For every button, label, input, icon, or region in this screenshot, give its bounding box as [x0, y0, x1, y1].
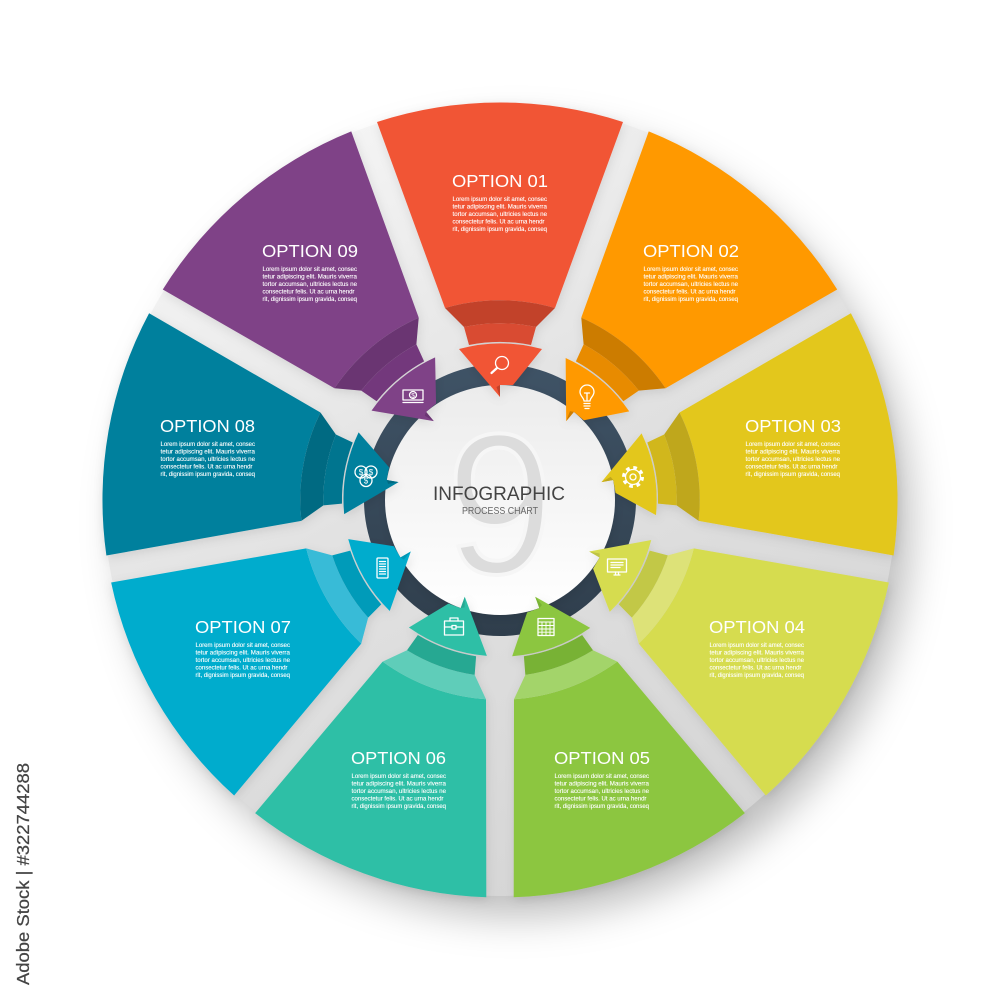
icon: phone	[377, 558, 388, 578]
text: option 01: rit, dignissim ipsum gravida, conseq	[452, 226, 547, 233]
icon: gear	[624, 468, 642, 486]
icon: briefcase	[444, 618, 464, 635]
central dark ring	[364, 364, 636, 636]
icon: calendar	[538, 618, 554, 636]
side label: Adobe Stock | #322744288	[13, 763, 33, 985]
text: option 03: tetur adipiscing elit. Mauris viverra	[746, 448, 840, 456]
segment 1 shape	[377, 102, 623, 397]
text: option 05: consectetur felis. Ut ac urna hendr	[554, 796, 647, 802]
text: option 03: consectetur felis. Ut ac urna hendr	[746, 464, 838, 470]
text: option 09: OPTION 09	[262, 241, 358, 261]
text: option 07	[195, 617, 291, 679]
text: option 03: rit, dignissim ipsum gravida, conseq	[746, 471, 840, 478]
text: option 07: OPTION 07	[195, 617, 291, 637]
text: option 04: OPTION 04	[709, 617, 805, 637]
text: option 01: tortor accumsan, ultricies lectus ne	[452, 211, 547, 218]
text: option 08: tetur adipiscing elit. Mauris viverra	[160, 448, 255, 456]
text: option 06: Lorem ipsum dolor sit amet, consec	[352, 773, 447, 780]
text: option 09: Lorem ipsum dolor sit amet, consec	[262, 266, 358, 273]
segment 6 shape	[248, 555, 580, 916]
icon: banknote: $	[411, 392, 415, 400]
text: option 09: tortor accumsan, ultricies lectus ne	[262, 281, 357, 288]
text: option 04	[709, 617, 805, 679]
text: option 04: consectetur felis. Ut ac urna hendr	[710, 664, 802, 672]
text: option 01: Lorem ipsum dolor sit amet, consec	[452, 196, 548, 203]
text: option 09: consectetur felis. Ut ac urna hendr	[262, 288, 355, 296]
center subtitle: PROCESS CHART	[462, 505, 538, 517]
segment 2 shape	[472, 116, 850, 500]
text: option 07: Lorem ipsum dolor sit amet, consec	[196, 642, 291, 649]
text: option 09	[262, 241, 358, 303]
text: option 08: tortor accumsan, ultricies lectus ne	[160, 456, 255, 463]
text: option 02: Lorem ipsum dolor sit amet, consec	[644, 266, 739, 273]
text: option 07: rit, dignissim ipsum gravida, conseq	[196, 672, 290, 679]
text: option 07: tortor accumsan, ultricies lectus ne	[196, 657, 290, 664]
text: option 06: OPTION 06	[351, 748, 446, 768]
text: option 06: tetur adipiscing elit. Mauris viverra	[352, 780, 446, 788]
text: option 08: consectetur felis. Ut ac urna hendr	[160, 464, 253, 470]
icon: light bulb	[580, 385, 594, 408]
segment 7 shape	[94, 445, 472, 805]
text: option 07: tetur adipiscing elit. Mauris viverra	[196, 650, 290, 656]
text: option 08	[160, 416, 256, 478]
text: option 04: tortor accumsan, ultricies lectus ne	[710, 657, 804, 664]
text: option 02: tortor accumsan, ultricies lectus ne	[644, 281, 738, 288]
center title: INFOGRAPHIC	[433, 484, 565, 505]
text: option 02: rit, dignissim ipsum gravida, conseq	[644, 296, 738, 303]
text: option 03: Lorem ipsum dolor sit amet, consec	[746, 441, 841, 448]
text: option 06	[351, 748, 447, 810]
text: option 08: rit, dignissim ipsum gravida, conseq	[160, 471, 255, 478]
segment 5 shape	[420, 555, 752, 916]
text: option 08: Lorem ipsum dolor sit amet, consec	[160, 441, 256, 448]
text: option 01: consectetur felis. Ut ac urna hendr	[452, 218, 545, 226]
text: option 05	[554, 748, 650, 810]
icon: banknote	[403, 390, 423, 402]
text: option 02: consectetur felis. Ut ac urna hendr	[644, 288, 736, 296]
icon: coins: $	[364, 476, 369, 486]
icon: magnifier	[492, 356, 508, 373]
icon: coins: $	[369, 468, 374, 477]
text: option 06: consectetur felis. Ut ac urna hendr	[352, 796, 444, 802]
text: option 07: consectetur felis. Ut ac urna hendr	[196, 664, 288, 672]
text: option 05: tetur adipiscing elit. Mauris viverra	[554, 780, 649, 788]
text: option 05: OPTION 05	[554, 748, 650, 768]
text: option 02: OPTION 02	[643, 241, 739, 261]
text: option 02	[643, 241, 739, 303]
text: option 03: OPTION 03	[745, 416, 841, 436]
central white disc	[385, 385, 615, 615]
text: option 04: rit, dignissim ipsum gravida, conseq	[710, 672, 804, 679]
text: option 01: OPTION 01	[452, 171, 548, 191]
segment 4 shape	[528, 445, 906, 805]
text: option 06: tortor accumsan, ultricies lectus ne	[352, 788, 446, 795]
text: option 03	[745, 416, 841, 478]
text: option 02: tetur adipiscing elit. Mauris viverra	[644, 274, 738, 280]
background shadow disc	[104, 104, 910, 916]
big number 9: 9	[447, 392, 553, 616]
text: option 01: tetur adipiscing elit. Mauris viverra	[452, 204, 547, 210]
text: option 09: rit, dignissim ipsum gravida, conseq	[262, 296, 357, 303]
text: option 05: tortor accumsan, ultricies lectus ne	[554, 788, 649, 795]
text: option 04: tetur adipiscing elit. Mauris viverra	[710, 650, 804, 656]
icon: coins	[355, 466, 377, 486]
icon: monitor	[608, 559, 626, 575]
text: option 06: rit, dignissim ipsum gravida, conseq	[352, 803, 446, 810]
segment 9 shape	[150, 116, 528, 500]
segment 8 shape	[87, 310, 420, 603]
text: option 05: rit, dignissim ipsum gravida, conseq	[554, 803, 649, 810]
text: option 04: Lorem ipsum dolor sit amet, consec	[710, 642, 805, 649]
icon: coins: $	[359, 468, 364, 477]
segment 3 shape	[580, 310, 913, 603]
text: option 01	[452, 171, 548, 233]
text: option 08: OPTION 08	[160, 416, 255, 436]
text: option 05: Lorem ipsum dolor sit amet, consec	[554, 773, 650, 780]
text: option 03: tortor accumsan, ultricies lectus ne	[746, 456, 840, 463]
text: option 09: tetur adipiscing elit. Mauris viverra	[262, 274, 357, 280]
